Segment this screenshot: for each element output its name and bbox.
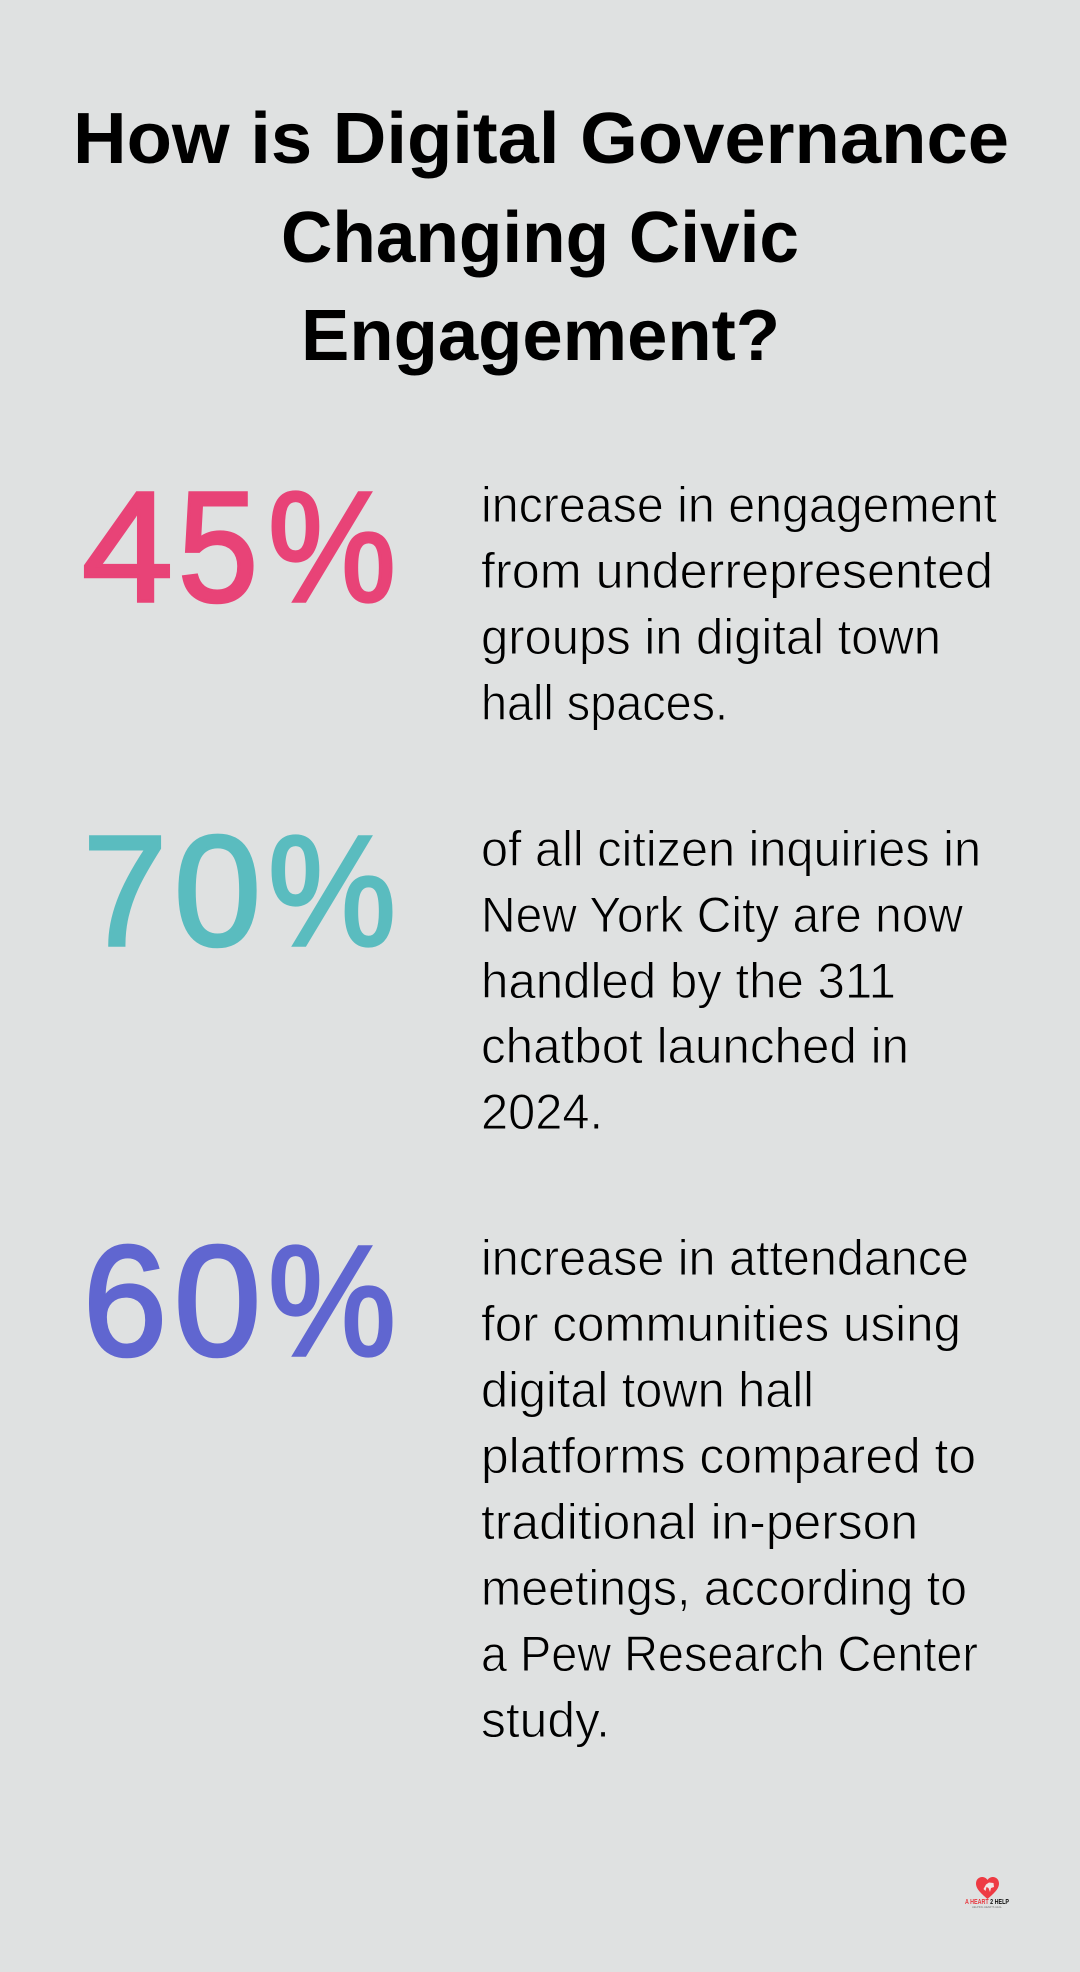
stat: 70% <box>83 804 396 979</box>
text block: 70% description: 2024. <box>481 1084 603 1140</box>
stat: 45%: 4 <box>82 460 173 635</box>
text block: 45% description: from underrepresented <box>481 543 993 599</box>
title: Changing Civic <box>281 198 799 278</box>
stat: 45% <box>82 460 396 635</box>
text block: 60% description: for communities using <box>481 1296 961 1352</box>
text block: 45% description <box>481 477 997 731</box>
text block: 70% description: New York City are now <box>481 887 964 943</box>
text block: 70% description: handled by the 311 <box>481 953 896 1009</box>
text block: 60% description: increase in attendance <box>481 1230 969 1286</box>
stat: 45%: % <box>268 460 396 635</box>
text block: 45% description: hall spaces. <box>481 675 728 731</box>
stat: 60%: 6 <box>83 1214 167 1389</box>
text block: 60% description: a Pew Research Center <box>481 1626 978 1682</box>
text block: 60% description: study. <box>481 1692 610 1748</box>
title: Engagement? <box>301 296 780 376</box>
title <box>73 99 1009 376</box>
text block: 45% description: increase in engagement <box>481 477 997 533</box>
text block: 60% description: meetings, according to <box>481 1560 967 1616</box>
stat: 60%: 0 <box>174 1214 261 1389</box>
text block: 60% description <box>481 1230 978 1748</box>
text block: 70% description <box>481 821 981 1140</box>
stat: 60% <box>83 1214 396 1389</box>
icon: heart with hands <box>976 1877 999 1899</box>
text block: 70% description: chatbot launched in <box>481 1018 909 1074</box>
logo: A Heart 2 Help <box>965 1877 1009 1909</box>
text block: 60% description: digital town hall <box>481 1362 814 1418</box>
stat: 70%: % <box>268 804 396 979</box>
text block: 70% description: of all citizen inquiries in <box>481 821 981 877</box>
text block: 60% description: traditional in-person <box>481 1494 918 1550</box>
title: How is Digital Governance <box>73 99 1009 179</box>
logo tagline: HELPING HEARTS HEAL <box>972 1905 1003 1909</box>
stat: 45%: 5 <box>178 460 258 635</box>
stat: 70%: 0 <box>174 804 261 979</box>
stat: 70%: 7 <box>83 804 167 979</box>
stat: 60%: % <box>268 1214 396 1389</box>
logo wordmark: A HEART 2 HELP <box>965 1899 1009 1906</box>
text block: 60% description: platforms compared to <box>481 1428 976 1484</box>
text block: 45% description: groups in digital town <box>481 609 941 665</box>
